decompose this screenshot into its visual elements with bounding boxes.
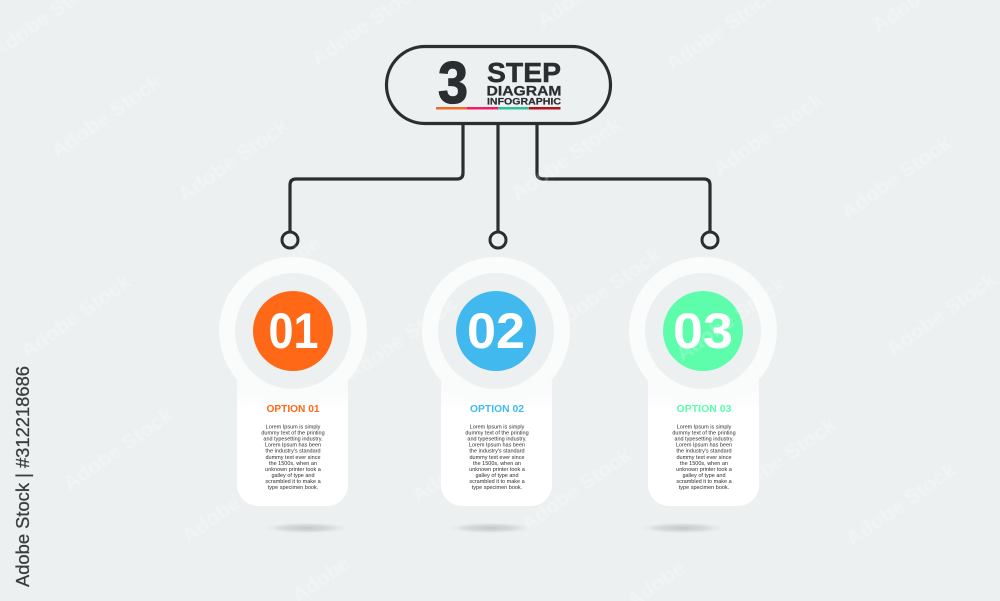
stock watermarks: Adobe Stock [547, 243, 666, 336]
body text 02: dummy text ever since [469, 455, 525, 461]
outer ring 01 [219, 257, 367, 405]
body text 01: dummy text of the printing [261, 431, 325, 437]
body text 02: Lorem Ipsum has been [469, 443, 525, 449]
body text 01: and typesetting industry. [263, 437, 323, 443]
body text 03: galley of type and [682, 473, 726, 479]
body text 01: galley of type and [271, 473, 315, 479]
body text 02: the industry's standard [469, 449, 525, 455]
stock watermarks: Adobe [258, 232, 325, 288]
stock id sidebar text: Adobe Stock | #312218686 [12, 366, 33, 587]
stock watermarks: Adobe Stock [837, 131, 956, 224]
number badge 01 [253, 291, 333, 371]
body text 02: dummy text of the printing [465, 431, 529, 437]
drop shadow 03 [636, 522, 728, 534]
stock watermarks: Adobe Stock [722, 413, 841, 506]
title colour underline [436, 107, 560, 110]
stock watermarks: Adobe Stock [507, 113, 626, 206]
body text 03: Lorem Ipsum is simply [677, 424, 732, 430]
drop shadow 01 [260, 522, 352, 534]
body text 03: the industry's standard [676, 449, 732, 455]
body text 02: galley of type and [475, 473, 519, 479]
body text 02: Lorem Ipsum is simply [470, 424, 525, 430]
body text 01: dummy text ever since [265, 455, 321, 461]
panel: option 03 [629, 232, 777, 534]
number 01: 01 [268, 303, 318, 359]
body text 01: scrambled it to make a [265, 479, 322, 485]
title pill [386, 46, 610, 124]
body text 03: scrambled it to make a [676, 479, 733, 485]
body text 01: Lorem Ipsum is simply [266, 424, 321, 430]
stock watermarks: Adobe Stock [342, 293, 461, 386]
number badge 03 [663, 291, 743, 371]
body text 02: and typesetting industry. [467, 437, 527, 443]
stock watermarks: Adobe [408, 452, 475, 508]
heading 02: OPTION 02 [470, 403, 524, 415]
stock watermarks: Adobe Stock [517, 443, 636, 536]
heading 01: OPTION 01 [266, 403, 320, 415]
stock watermarks: Adobe Stock [709, 88, 828, 181]
connector lines [290, 124, 710, 232]
stock watermarks: Adobe Stock [672, 273, 791, 366]
body text 01: unknown printer took a [265, 467, 322, 473]
stock watermarks: Adobe Stock [47, 70, 166, 163]
inner ring 02 [438, 273, 554, 389]
body text 03: unknown printer took a [676, 467, 733, 473]
card 01 [237, 370, 348, 506]
body text 02: scrambled it to make a [469, 479, 526, 485]
body text 01: the 1500s, when an [269, 461, 317, 467]
connector ring 01 [282, 232, 298, 248]
title word STEP: STEP [487, 57, 561, 88]
stock watermarks: Adobe Stock [882, 268, 1000, 361]
card 03 [648, 370, 759, 506]
card 02 [441, 370, 552, 506]
panel: option 01 [219, 232, 367, 534]
outer ring 02 [422, 257, 570, 405]
body text 02: type specimen book. [472, 485, 523, 491]
number badge 02 [456, 291, 536, 371]
stock watermarks: Adobe Stock [174, 114, 293, 207]
panel: option 02 [422, 232, 570, 534]
body text 03: Lorem Ipsum has been [676, 443, 732, 449]
body text 02: unknown printer took a [469, 467, 526, 473]
title word INFOGRAPHIC: INFOGRAPHIC [487, 96, 561, 106]
stock watermarks: Adobe Stock [59, 403, 178, 496]
connector ring 02 [490, 232, 506, 248]
stock watermarks: Adobe [178, 492, 245, 548]
body text 01: Lorem Ipsum has been [265, 443, 321, 449]
body text 01: type specimen book. [268, 485, 319, 491]
body text 02: the 1500s, when an [473, 461, 521, 467]
heading 03: OPTION 03 [676, 403, 732, 415]
stock watermarks: Adobe Stock [17, 270, 136, 363]
body text 03: and typesetting industry. [674, 437, 734, 443]
body text 01: the industry's standard [265, 449, 321, 455]
connector ring 03 [702, 232, 718, 248]
body text 03: the 1500s, when an [680, 461, 728, 467]
number 03: 03 [673, 303, 733, 359]
body text 03: dummy text of the printing [672, 431, 736, 437]
drop shadow 02 [444, 522, 536, 534]
title word DIAGRAM: DIAGRAM [486, 84, 562, 98]
body text 03: type specimen book. [679, 485, 730, 491]
title numeral 3: 3 [438, 50, 468, 116]
inner ring 01 [235, 273, 351, 389]
number 02: 02 [467, 303, 525, 359]
inner ring 03 [645, 273, 761, 389]
body text 03: dummy text ever since [676, 455, 732, 461]
stock watermarks: Adobe Stock [842, 458, 961, 551]
outer ring 03 [629, 257, 777, 405]
